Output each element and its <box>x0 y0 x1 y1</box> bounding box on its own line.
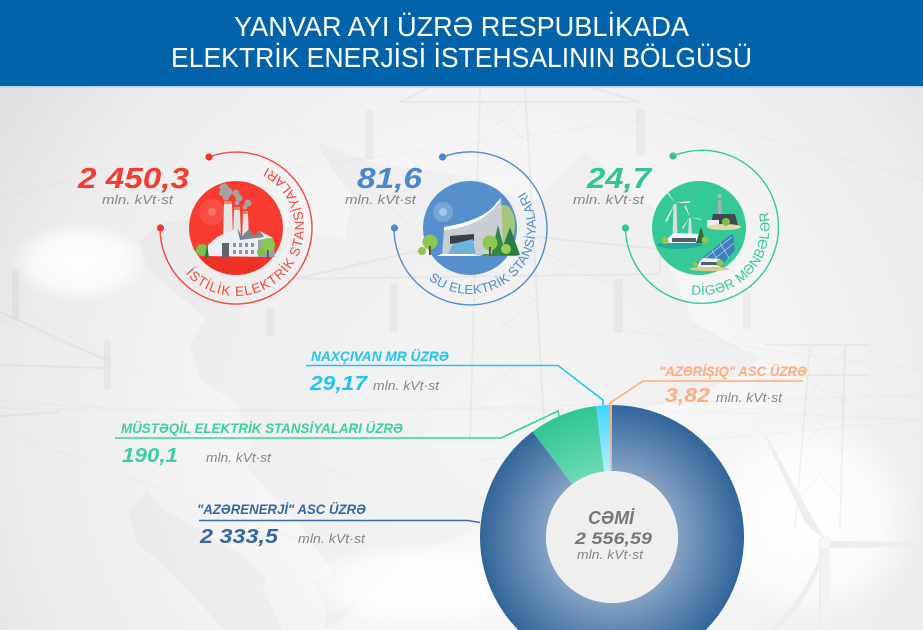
label: Azərenerji ASC: 2 333,5 <box>199 526 279 548</box>
label: Azərenerji ASC: mln. kVt·st <box>298 531 367 546</box>
slice: Müstəqil <box>533 406 604 484</box>
label: Azərenerji ASC <box>197 501 367 548</box>
icon: renewable energy <box>652 181 746 275</box>
panel: other sources <box>573 150 780 304</box>
label: Naxçıvan MR: 29,17 <box>309 373 368 395</box>
value: 2 450,3: 2 450,3 <box>77 163 189 195</box>
total label: CƏMİ <box>588 508 635 528</box>
curved label: DİGƏR MƏNBƏLƏR <box>692 212 770 295</box>
power lines <box>0 110 923 540</box>
label: Naxçıvan MR <box>309 348 450 395</box>
side pylons <box>0 312 870 530</box>
ring with dots <box>157 152 312 304</box>
curved label: SU ELEKTRİK STANSİYALARI <box>430 192 536 294</box>
value: 2 450,3 <box>77 163 189 207</box>
label: Müstəqil elektrik stansiyaları: 190,1 <box>122 445 178 467</box>
map of Azerbaijan silhouette <box>128 143 760 630</box>
total label: 2 556,59 <box>574 529 653 548</box>
icon: power plant <box>189 181 283 277</box>
value: 81,6: 81,6 <box>357 163 423 195</box>
label: Azərişıq ASC: "AZƏRİŞIQ" ASC ÜZRƏ <box>659 363 808 379</box>
header banner <box>0 0 923 88</box>
insulators <box>12 109 751 390</box>
ring with dots <box>391 152 547 305</box>
title: ELEKTRİK ENERJİSİ İSTEHSALININ BÖLGÜSÜ <box>171 42 752 73</box>
value: 2 450,3: mln. kVt·st <box>102 192 175 207</box>
value: 24,7 <box>573 163 653 207</box>
title: YANVAR AYI ÜZRƏ RESPUBLİKADA <box>234 11 689 42</box>
label: Müstəqil elektrik stansiyaları <box>121 420 404 467</box>
ring with dots <box>622 150 778 303</box>
wind turbine <box>765 437 923 630</box>
label: Azərenerji ASC: "AZƏRENERJİ" ASC ÜZRƏ <box>197 501 366 517</box>
value: 24,7: 24,7 <box>586 163 653 195</box>
label: Azərişıq ASC <box>659 363 808 407</box>
value: 24,7: mln. kVt·st <box>573 192 646 207</box>
connector lines <box>115 366 803 522</box>
icon: hydro dam <box>418 181 520 275</box>
label: Azərişıq ASC: mln. kVt·st <box>716 390 783 405</box>
label: Naxçıvan MR: NAXÇIVAN MR ÜZRƏ <box>311 348 450 364</box>
white soft highlights <box>10 222 920 630</box>
total label <box>574 508 653 562</box>
donut chart <box>480 405 744 630</box>
slice: Azərenerji <box>480 405 744 630</box>
label: Müstəqil elektrik stansiyaları: MÜSTƏQİL ELEKTRİK STANSİYALARI ÜZRƏ <box>121 420 404 436</box>
slice: Naxçıvan <box>596 405 611 472</box>
total label: mln. kVt·st <box>577 547 644 562</box>
label: Azərişıq ASC: 3,82 <box>665 385 710 407</box>
value: 81,6 <box>345 163 423 207</box>
donut centre <box>546 471 678 603</box>
slice: Azərişıq <box>610 405 612 471</box>
curved label: İSTİLİK ELEKTRİK STANSİYALARI <box>186 168 304 296</box>
value: 81,6: mln. kVt·st <box>345 192 418 207</box>
panel: hydro power stations <box>345 151 548 306</box>
label: Naxçıvan MR: mln. kVt·st <box>373 378 440 393</box>
panel: thermal power stations <box>77 151 313 305</box>
central transmission pylon <box>294 87 660 440</box>
title <box>171 11 752 73</box>
label: Müstəqil elektrik stansiyaları: mln. kVt·st <box>206 450 272 465</box>
